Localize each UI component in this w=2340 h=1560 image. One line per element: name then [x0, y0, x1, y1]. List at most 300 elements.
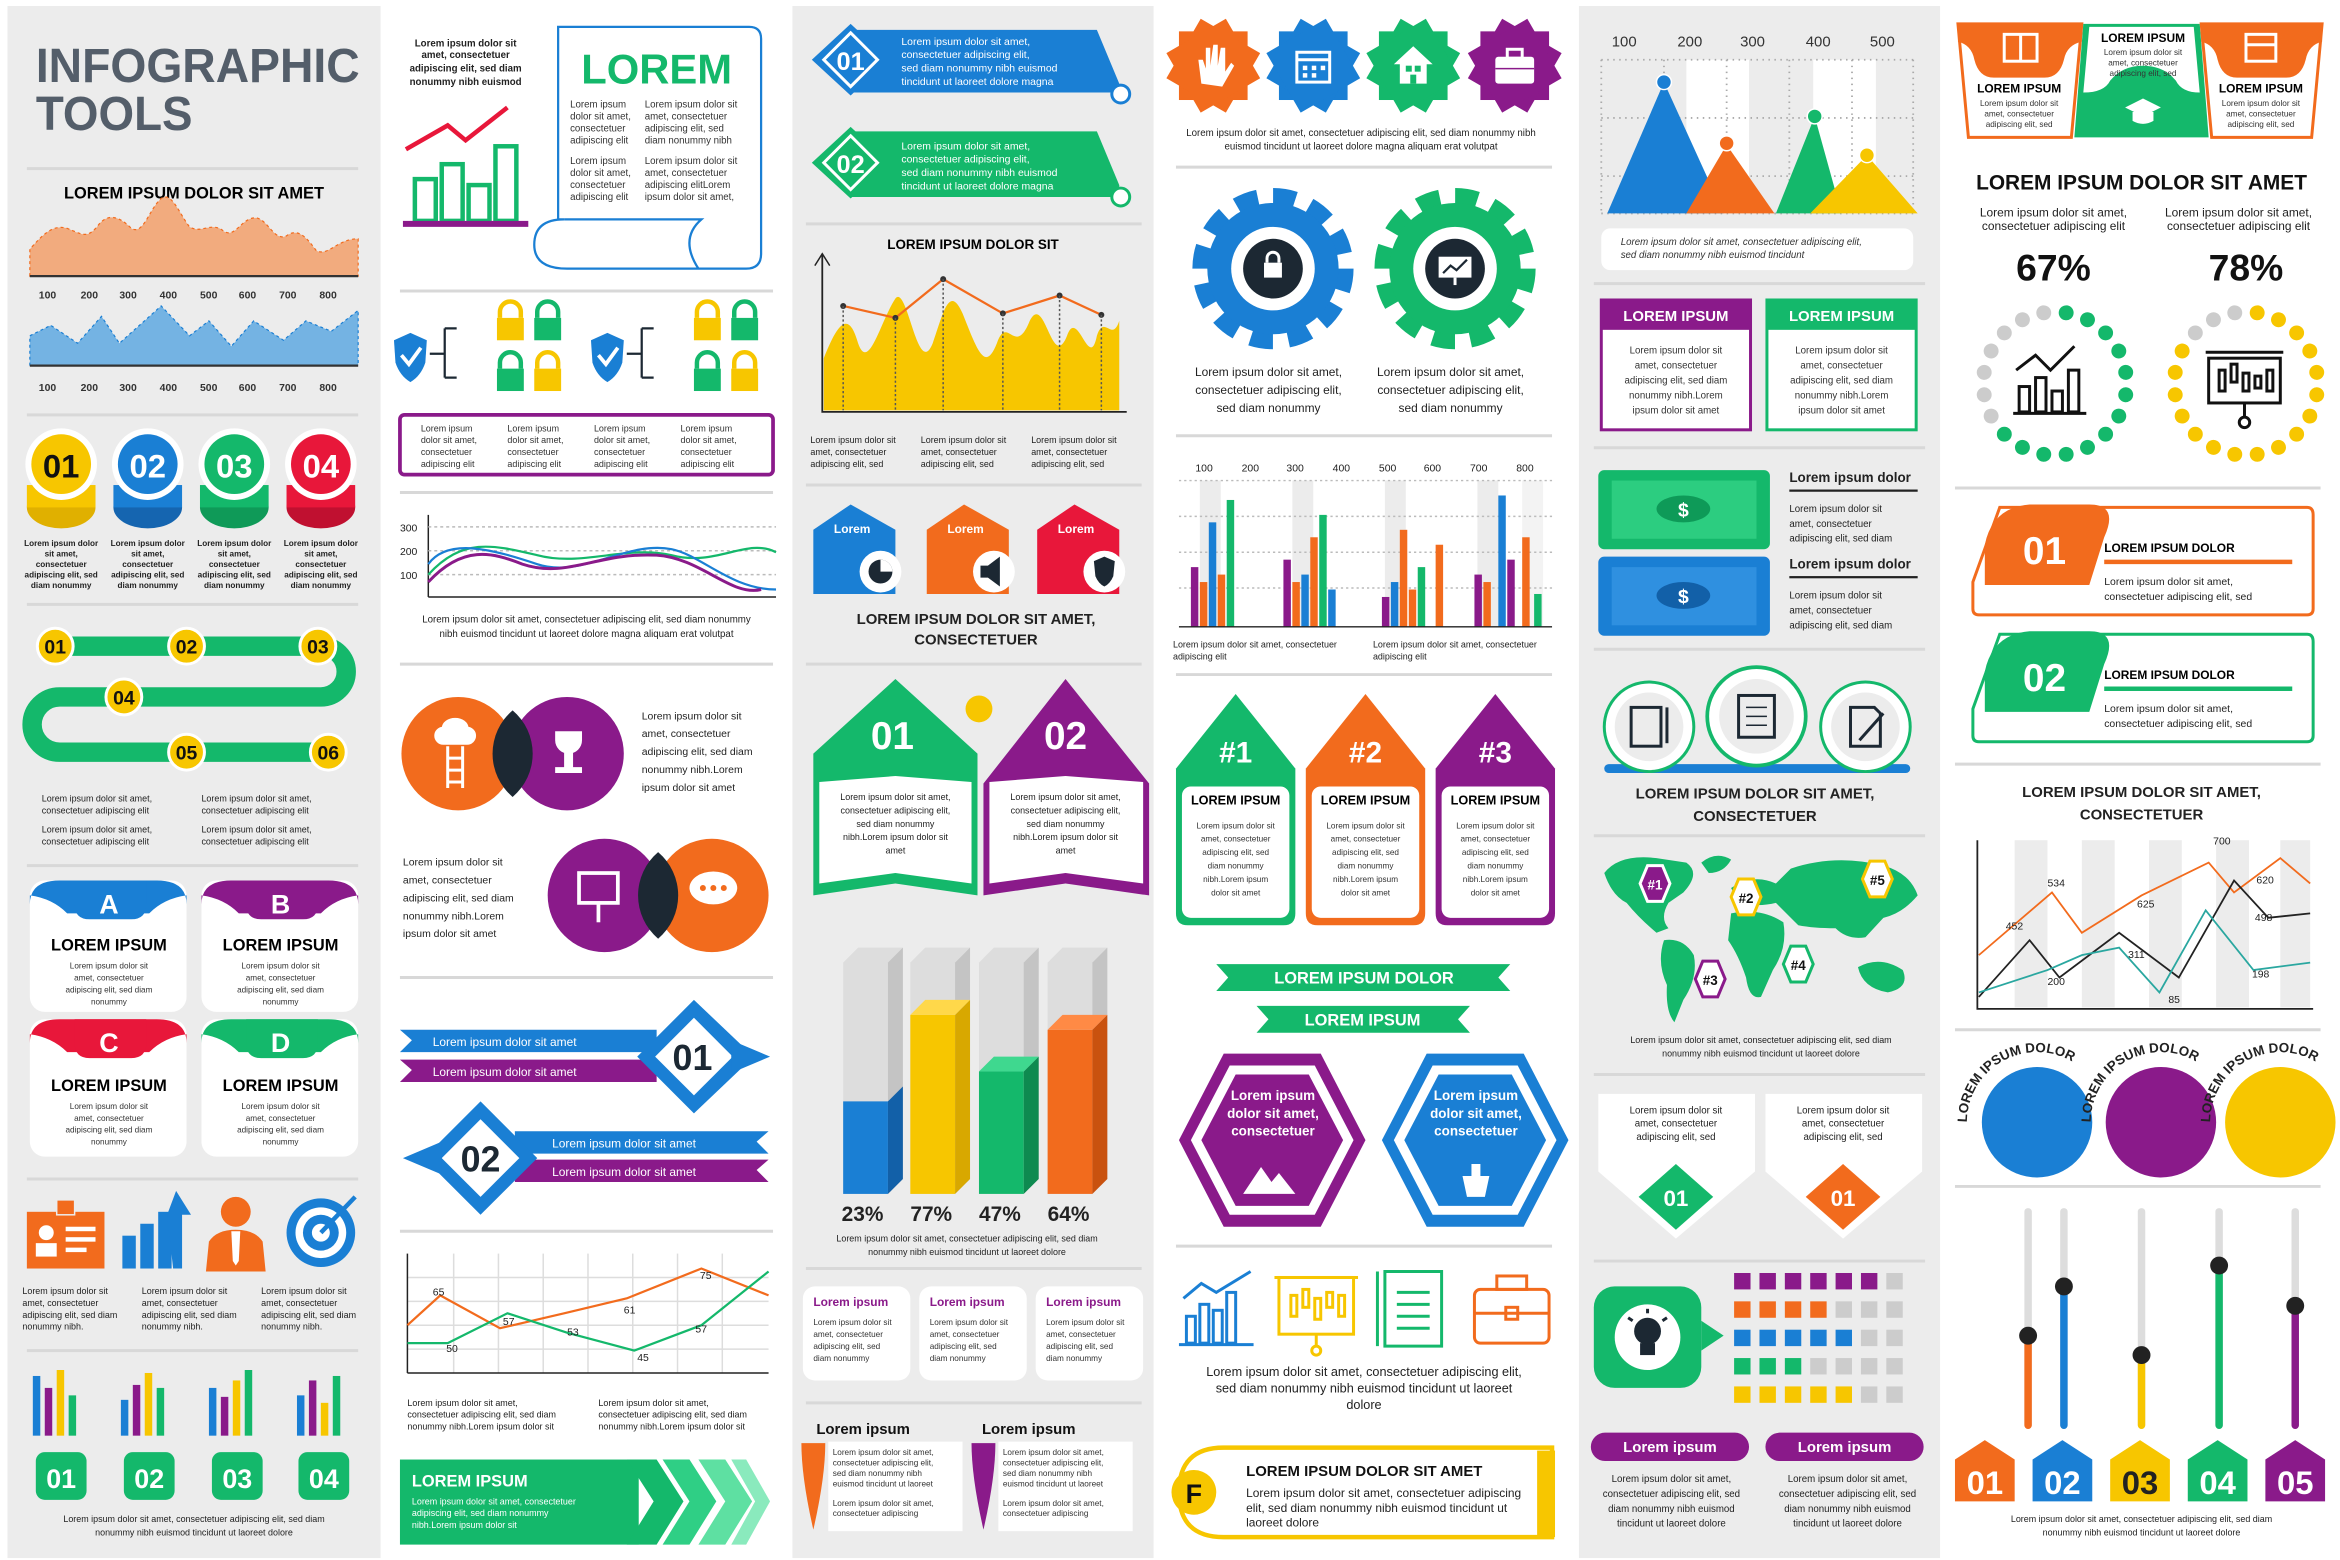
snake timeline: Lorem ipsum dolor sit amet,: [42, 793, 152, 803]
triangle chart: 400: [1806, 33, 1831, 50]
area charts: 700: [279, 290, 297, 301]
pentagon cards 01 02: consectetuer adipiscing elit,: [1011, 805, 1120, 815]
ribbons and hexagons: LOREM IPSUM DOLOR: [1274, 969, 1454, 987]
ribbons and hexagons: consectetuer: [1231, 1124, 1316, 1139]
mini bar charts 01-04: 02: [134, 1464, 164, 1494]
line icons row: Lorem ipsum dolor sit amet, consectetuer adipiscing elit,: [1206, 1365, 1522, 1379]
ABCD cards: amet, consectetuer: [246, 973, 316, 982]
circle icons on bar: [1604, 667, 1910, 825]
purple text box: Lorem ipsum: [421, 423, 473, 433]
ABCD cards: Lorem ipsum dolor sit: [70, 1102, 149, 1111]
multi line chart: CONSECTETUER: [2080, 806, 2203, 823]
numbered badges 01-04: Lorem ipsum dolor: [24, 539, 99, 548]
area charts: 600: [239, 383, 256, 394]
multi line chart: 452: [2006, 922, 2023, 933]
#1 #2 #3 cards: adipiscing elit, sed: [1462, 848, 1529, 857]
ribbons and hexagons: dolor sit amet,: [1430, 1106, 1522, 1121]
pentagon cards 01 02: [813, 679, 1149, 895]
gears: Lorem ipsum dolor sit amet,: [1195, 365, 1342, 379]
diamond cards: amet, consectetuer: [1802, 1119, 1885, 1130]
triangle chart: sed diam nonummy nibh euismod tincidunt: [1621, 250, 1806, 261]
grouped bar chart: Lorem ipsum dolor sit amet, consectetuer: [1173, 640, 1337, 650]
purple pills with text: diam nonummy nibh euismod: [1608, 1504, 1735, 1515]
purple pills with text: Lorem ipsum: [1798, 1439, 1891, 1456]
grouped bar chart: 800: [1516, 464, 1534, 475]
outlined cards: ipsum dolor sit amet: [1633, 405, 1720, 416]
banner 01: [812, 24, 1130, 103]
top tabs: adipiscing elit, sed: [2227, 120, 2295, 129]
three white cards: Lorem ipsum dolor sit: [1046, 1318, 1125, 1327]
percent heading: LOREM IPSUM DOLOR SIT AMET: [1976, 172, 2307, 195]
ABCD cards: adipiscing elit, sed diam: [237, 1126, 324, 1135]
#1 #2 #3 cards: LOREM IPSUM: [1321, 793, 1410, 807]
numbered cards 01 02: Lorem ipsum dolor sit amet,: [2104, 577, 2233, 588]
#1 #2 #3 cards: #3: [1479, 737, 1512, 770]
pentagon cards 01 02: nibh.Lorem ipsum dolor sit: [1013, 832, 1118, 842]
venn 2: amet, consectetuer: [403, 875, 492, 886]
ABCD cards: Lorem ipsum dolor sit: [70, 962, 149, 971]
ribbons and hexagons: Lorem ipsum: [1231, 1088, 1315, 1103]
pentagon cards 01 02: 02: [1044, 715, 1087, 758]
grouped bar chart: 700: [1470, 464, 1488, 475]
money bills: adipiscing elit, sed diam: [1789, 620, 1892, 631]
#1 #2 #3 cards: #2: [1349, 737, 1382, 770]
numbered badges 01-04: 02: [129, 448, 166, 485]
#1 #2 #3 cards: diam nonummy: [1467, 862, 1524, 871]
area charts: 400: [160, 383, 177, 394]
area charts: 800: [319, 383, 337, 394]
area charts: 100: [39, 290, 56, 301]
ABCD cards: B: [271, 889, 290, 919]
snake timeline: 01: [44, 637, 66, 659]
#1 #2 #3 cards: diam nonummy: [1338, 862, 1394, 871]
#1 #2 #3 cards: adipiscing elit, sed: [1202, 848, 1270, 857]
numbered cards 01 02: [1973, 504, 2313, 742]
money bills: Lorem ipsum dolor: [1789, 557, 1912, 572]
banner 02: consectetuer adipiscing elit,: [901, 155, 1030, 166]
world map: #3: [1703, 973, 1718, 988]
gears: consectetuer adipiscing elit,: [1377, 383, 1524, 397]
venn 2: Lorem ipsum dolor sit: [403, 858, 503, 869]
mini bar charts 01-04: 04: [309, 1464, 339, 1494]
outlined cards: nonummy nibh.Lorem: [1795, 390, 1888, 401]
top tabs: LOREM IPSUM: [2219, 82, 2303, 96]
chart + scroll panel: consectetuer: [570, 123, 626, 134]
diamond cards: amet, consectetuer: [1635, 1119, 1718, 1130]
top tabs: amet, consectetuer: [2108, 59, 2178, 68]
multi line chart: 311: [2128, 950, 2145, 961]
3D bar chart: 23%: [842, 1203, 884, 1226]
house icons: [813, 504, 1125, 649]
ribbon 02: Lorem ipsum dolor sit amet: [552, 1165, 697, 1179]
grouped bar chart: 600: [1424, 464, 1441, 475]
number tags 01-05: Lorem ipsum dolor sit amet, consectetuer adipiscing elit, sed diam: [2011, 1514, 2272, 1524]
top tabs: amet, consectetuer: [2226, 109, 2296, 118]
#1 #2 #3 cards: diam nonummy: [1208, 862, 1265, 871]
three white cards: adipiscing elit, sed: [930, 1342, 997, 1351]
green chevron banner: adipiscing elit, sed diam nonummy: [412, 1508, 549, 1518]
area charts: 500: [200, 290, 218, 301]
green chevron banner: [400, 1460, 770, 1545]
numbered cards 01 02: 02: [2023, 657, 2066, 700]
area charts: 300: [119, 383, 137, 394]
curved label circles: LOREM IPSUM DOLOR: [2200, 1042, 2318, 1122]
circle icons on bar: CONSECTETUER: [1693, 808, 1817, 825]
number tags 01-05: 02: [2044, 1464, 2081, 1501]
world map: #2: [1739, 891, 1754, 906]
outlined cards: amet, consectetuer: [1800, 361, 1884, 372]
grid line chart: 50: [446, 1344, 458, 1355]
purple pills with text: tincidunt ut laoreet dolore: [1617, 1519, 1726, 1530]
money bills: adipiscing elit, sed diam: [1789, 534, 1892, 545]
numbered cards 01 02: LOREM IPSUM DOLOR: [2104, 668, 2235, 682]
purple text box: consectetuer: [681, 447, 732, 457]
title: TOOLS: [36, 88, 193, 141]
numbered cards 01 02: Lorem ipsum dolor sit amet,: [2104, 704, 2233, 715]
money bills: $: [1678, 499, 1689, 521]
drop markers: consectetuer adipiscing: [833, 1509, 919, 1518]
percent heading: 67%: [2016, 247, 2091, 289]
money bills: amet, consectetuer: [1789, 605, 1872, 616]
drop markers: consectetuer adipiscing elit,: [1003, 1459, 1103, 1468]
numbered badges 01-04: Lorem ipsum dolor: [284, 539, 359, 548]
diamond cards: adipiscing elit, sed: [1803, 1132, 1883, 1143]
drop markers: Lorem ipsum: [982, 1421, 1076, 1438]
F callout: elit, sed diam nonummy nibh euismod tincidunt ut: [1246, 1501, 1508, 1515]
business icons row: amet, consectetuer: [261, 1298, 337, 1308]
diamond cards: Lorem ipsum dolor sit: [1630, 1105, 1723, 1116]
chart + scroll panel: Lorem ipsum: [570, 156, 626, 167]
multi line chart: 498: [2255, 913, 2273, 924]
F callout: LOREM IPSUM DOLOR SIT AMET: [1246, 1463, 1482, 1480]
top tabs: Lorem ipsum dolor sit: [2104, 48, 2183, 57]
gears: sed diam nonummy: [1216, 401, 1321, 415]
F callout: [1171, 1448, 1555, 1537]
grouped bar chart: adipiscing elit: [1373, 652, 1427, 662]
line icons row: dolore: [1346, 1398, 1382, 1412]
ABCD cards: nonummy: [263, 1138, 299, 1147]
line icons row: [1179, 1272, 1549, 1412]
#1 #2 #3 cards: dolor sit amet: [1211, 888, 1261, 897]
pentagon cards 01 02: 01: [871, 715, 914, 758]
#1 #2 #3 cards: Lorem ipsum dolor sit: [1326, 821, 1405, 830]
business icons row: nonummy nibh.: [142, 1322, 203, 1332]
purple text box: [400, 415, 773, 475]
pentagon cards 01 02: consectetuer adipiscing elit,: [841, 805, 950, 815]
snake timeline: Lorem ipsum dolor sit amet,: [201, 793, 312, 803]
three white cards: amet, consectetuer: [1046, 1330, 1116, 1339]
banner 02: 02: [837, 151, 865, 179]
wave line chart: 200: [400, 547, 418, 558]
#1 #2 #3 cards: Lorem ipsum dolor sit: [1456, 821, 1535, 830]
snake timeline: consectetuer adipiscing elit: [42, 805, 150, 815]
multi line chart: 534: [2048, 878, 2065, 889]
top tabs: LOREM IPSUM: [1977, 82, 2061, 96]
grouped bar chart: 200: [1242, 464, 1259, 475]
world map: #1: [1648, 877, 1663, 892]
chart + scroll panel: Lorem ipsum: [570, 99, 626, 110]
starburst icons: [1166, 19, 1562, 152]
area charts: LOREM IPSUM DOLOR SIT AMET: [64, 185, 324, 203]
three white cards: Lorem ipsum dolor sit: [930, 1318, 1009, 1327]
world map: Lorem ipsum dolor sit amet, consectetuer adipiscing elit, sed diam: [1630, 1035, 1892, 1045]
sliders: [2019, 1212, 2304, 1425]
ABCD cards: LOREM IPSUM: [51, 1077, 167, 1095]
chart + scroll panel: Lorem ipsum dolor sit: [645, 99, 738, 110]
ribbon 01: Lorem ipsum dolor sit amet: [433, 1065, 577, 1079]
gears: Lorem ipsum dolor sit amet,: [1377, 365, 1524, 379]
yellow area chart: adipiscing elit, sed: [921, 459, 994, 469]
purple text box: dolor sit amet,: [421, 435, 477, 445]
ribbons and hexagons: LOREM IPSUM: [1305, 1011, 1420, 1029]
percent heading: consectetuer adipiscing elit: [2167, 219, 2311, 233]
purple text box: Lorem ipsum: [681, 423, 732, 433]
wave line chart: nibh euismod tincidunt ut laoreet dolore magna aliquam erat volutpat: [439, 629, 734, 640]
grid line chart: Lorem ipsum dolor sit amet,: [598, 1398, 709, 1408]
chart + scroll panel: dolor sit amet,: [570, 111, 631, 122]
drop markers: sed diam nonummy nibh: [1003, 1469, 1093, 1478]
circle icons on bar: LOREM IPSUM DOLOR SIT AMET,: [1636, 785, 1874, 802]
numbered cards 01 02: consectetuer adipiscing elit, sed: [2104, 719, 2252, 730]
percent heading: Lorem ipsum dolor sit amet,: [1980, 205, 2127, 219]
purple text box: dolor sit amet,: [594, 435, 650, 445]
pentagon cards 01 02: sed diam nonummy: [856, 819, 935, 829]
chart + scroll panel: adipiscing elit, sed diam: [410, 64, 522, 75]
percent heading: 78%: [2209, 247, 2283, 289]
outlined cards: nonummy nibh.Lorem: [1629, 390, 1723, 401]
pentagon cards 01 02: nibh.Lorem ipsum dolor sit: [843, 832, 948, 842]
purple text box: adipiscing elit: [421, 459, 475, 469]
purple text box: consectetuer: [594, 447, 645, 457]
ABCD cards: nonummy: [91, 997, 128, 1006]
drop markers: [801, 1421, 1133, 1531]
snake timeline: 05: [176, 743, 198, 765]
multi line chart: LOREM IPSUM DOLOR SIT AMET,: [2022, 784, 2261, 801]
venn 2: [403, 839, 769, 952]
shields and locks: [394, 301, 758, 391]
snake timeline: 04: [113, 687, 135, 709]
dotted progress circle 78%: [2167, 304, 2325, 463]
wave line chart: [400, 515, 776, 640]
ABCD cards: amet, consectetuer: [74, 973, 144, 982]
ABCD cards: adipiscing elit, sed diam: [65, 985, 153, 994]
area charts: 700: [279, 383, 297, 394]
business icons row: Lorem ipsum dolor sit: [22, 1286, 108, 1296]
purple pills with text: consectetuer adipiscing elit, sed: [1603, 1489, 1740, 1500]
numbered badges 01-04: consectetuer: [36, 560, 87, 569]
grid line chart: consectetuer adipiscing elit, sed diam: [407, 1410, 556, 1420]
mini bar charts 01-04: Lorem ipsum dolor sit amet, consectetuer adipiscing elit, sed diam: [63, 1514, 325, 1524]
#1 #2 #3 cards: amet, consectetuer: [1331, 835, 1401, 844]
#1 #2 #3 cards: nibh.Lorem ipsum: [1333, 875, 1398, 884]
grouped bar chart: [1173, 464, 1552, 662]
purple text box: consectetuer: [507, 447, 559, 457]
purple text box: adipiscing elit: [507, 459, 562, 469]
three white cards: adipiscing elit, sed: [813, 1342, 881, 1351]
outlined cards: Lorem ipsum dolor sit: [1630, 346, 1723, 357]
title: [36, 40, 360, 141]
#1 #2 #3 cards: adipiscing elit, sed: [1332, 848, 1399, 857]
curved label circles: LOREM IPSUM DOLOR: [1958, 1042, 2075, 1122]
pentagon cards 01 02: sed diam nonummy: [1027, 819, 1105, 829]
curved label circles: [1958, 1042, 2336, 1178]
grid line chart: [407, 1254, 769, 1432]
drop markers: Lorem ipsum dolor sit amet,: [833, 1448, 934, 1457]
#1 #2 #3 cards: Lorem ipsum dolor sit: [1197, 821, 1276, 830]
numbered badges 01-04: diam nonummy: [117, 581, 178, 590]
3D bar chart: 64%: [1048, 1203, 1090, 1226]
ribbon 01: [400, 1000, 770, 1113]
purple text box: Lorem ipsum: [594, 423, 646, 433]
numbered badges 01-04: adipiscing elit, sed: [198, 571, 271, 580]
percent heading: consectetuer adipiscing elit: [1982, 219, 2126, 233]
outlined cards: amet, consectetuer: [1635, 361, 1718, 372]
triangle chart: 300: [1740, 33, 1765, 50]
area charts: 200: [81, 290, 98, 301]
chart + scroll panel: adipiscing elitLorem: [645, 180, 730, 191]
multi line chart: 620: [2256, 875, 2274, 886]
numbered cards 01 02: 01: [2023, 530, 2066, 573]
diamond cards: 01: [1663, 1186, 1688, 1211]
diamond cards: adipiscing elit, sed: [1636, 1132, 1715, 1143]
triangle chart: [1601, 33, 1918, 270]
venn 2: ipsum dolor sit amet: [403, 929, 496, 940]
multi line chart: 700: [2213, 837, 2231, 848]
snake timeline: 03: [307, 637, 329, 659]
three white cards: adipiscing elit, sed: [1046, 1342, 1113, 1351]
ribbons and hexagons: Lorem ipsum: [1434, 1088, 1518, 1103]
ABCD cards: A: [99, 889, 119, 919]
yellow area chart: Lorem ipsum dolor sit: [810, 435, 896, 445]
three white cards: Lorem ipsum: [813, 1295, 888, 1309]
ABCD cards: amet, consectetuer: [246, 1114, 316, 1123]
numbered badges 01-04: 01: [43, 448, 79, 485]
drop markers: Lorem ipsum: [816, 1421, 910, 1438]
outlined cards: [1601, 300, 1916, 430]
line icons row: sed diam nonummy nibh euismod tincidunt ut laoreet: [1216, 1381, 1513, 1395]
#1 #2 #3 cards: dolor sit amet: [1341, 888, 1391, 897]
numbered badges 01-04: sit amet,: [131, 550, 164, 559]
money bills: Lorem ipsum dolor sit: [1789, 504, 1882, 515]
F callout: F: [1186, 1479, 1202, 1509]
purple pills with text: Lorem ipsum dolor sit amet,: [1612, 1474, 1731, 1485]
ribbons and hexagons: dolor sit amet,: [1227, 1106, 1319, 1121]
grid line chart: 57: [695, 1325, 707, 1336]
green chevron banner: Lorem ipsum dolor sit amet, consectetuer: [412, 1496, 576, 1506]
numbered cards 01 02: LOREM IPSUM DOLOR: [2104, 541, 2235, 555]
ABCD cards: LOREM IPSUM: [223, 1077, 338, 1095]
yellow area chart: amet, consectetuer: [810, 447, 886, 457]
house icons: Lorem: [1058, 522, 1094, 536]
drop markers: Lorem ipsum dolor sit amet,: [833, 1499, 934, 1508]
ABCD cards: LOREM IPSUM: [51, 937, 167, 955]
ribbon 01: Lorem ipsum dolor sit amet: [433, 1035, 577, 1049]
ABCD cards: Lorem ipsum dolor sit: [241, 1102, 320, 1111]
numbered badges 01-04: [24, 428, 359, 590]
banner 01: sed diam nonummy nibh euismod: [901, 64, 1058, 75]
ribbons and hexagons: [1179, 964, 1568, 1227]
purple pills with text: Lorem ipsum dolor sit amet,: [1788, 1474, 1907, 1485]
chart + scroll panel: amet, consectetuer: [645, 111, 728, 122]
gears: consectetuer adipiscing elit,: [1195, 383, 1342, 397]
snake timeline: 02: [176, 637, 197, 659]
business icons row: nonummy nibh.: [22, 1322, 83, 1332]
ABCD cards: D: [271, 1028, 290, 1058]
chart + scroll panel: nonummy nibh euismod: [410, 77, 522, 88]
gears: sed diam nonummy: [1399, 401, 1503, 415]
ABCD cards: [30, 881, 358, 1157]
grid line chart: Lorem ipsum dolor sit amet,: [407, 1398, 518, 1408]
snake timeline: consectetuer adipiscing elit: [42, 837, 150, 847]
top tabs: amet, consectetuer: [1984, 109, 2054, 118]
venn 1: [401, 697, 753, 810]
mini bar charts 01-04: [33, 1370, 349, 1538]
banner 01: 01: [837, 48, 865, 76]
drop markers: euismod tincidunt ut laoreet: [1003, 1479, 1104, 1488]
business icons row: nonummy nibh.: [261, 1322, 322, 1332]
#1 #2 #3 cards: amet, consectetuer: [1461, 835, 1530, 844]
starburst icons: euismod tincidunt ut laoreet dolore magna aliquam erat volutpat: [1225, 141, 1498, 152]
mini bar charts 01-04: 03: [222, 1464, 252, 1494]
world map: #4: [1791, 958, 1806, 973]
grid line chart: 53: [567, 1328, 579, 1339]
three white cards: amet, consectetuer: [930, 1330, 1000, 1339]
F callout: Lorem ipsum dolor sit amet, consectetuer adipiscing: [1246, 1486, 1521, 1500]
yellow area chart: amet, consectetuer: [1031, 447, 1107, 457]
banner 02: [812, 127, 1130, 206]
number tags 01-05: [1955, 1440, 2325, 1538]
outlined cards: adipiscing elit, sed diam: [1790, 376, 1893, 387]
green chevron banner: LOREM IPSUM: [412, 1472, 528, 1490]
multi line chart: 198: [2252, 970, 2270, 981]
chart + scroll panel: LOREM: [581, 46, 732, 93]
grouped bar chart: adipiscing elit: [1173, 652, 1227, 662]
chart + scroll panel: Lorem ipsum dolor sit: [415, 38, 517, 49]
ABCD cards: nonummy: [91, 1138, 128, 1147]
chart + scroll panel: diam nonummy nibh: [645, 135, 732, 146]
business icons row: adipiscing elit, sed diam: [261, 1310, 356, 1320]
numbered badges 01-04: Lorem ipsum dolor: [197, 539, 272, 548]
triangle chart: 100: [1612, 33, 1637, 50]
numbered badges 01-04: consectetuer: [295, 560, 347, 569]
chart + scroll panel: consectetuer: [570, 180, 626, 191]
multi line chart: [1977, 784, 2313, 1009]
purple pills with text: consectetuer adipiscing elit, sed: [1779, 1489, 1916, 1500]
purple text box: adipiscing elit: [681, 459, 735, 469]
numbered badges 01-04: sit amet,: [218, 550, 251, 559]
snake timeline: [32, 628, 346, 847]
numbered badges 01-04: adipiscing elit, sed: [25, 571, 98, 580]
business icons row: adipiscing elit, sed diam: [22, 1310, 117, 1320]
ribbon 02: Lorem ipsum dolor sit amet: [552, 1137, 697, 1151]
grid line chart: 61: [624, 1305, 636, 1316]
world map: #5: [1870, 873, 1885, 888]
wave line chart: 100: [400, 571, 418, 582]
snake timeline: Lorem ipsum dolor sit amet,: [201, 825, 312, 835]
money bills: $: [1678, 586, 1689, 608]
triangle chart: Lorem ipsum dolor sit amet, consectetuer adipiscing elit,: [1621, 237, 1862, 248]
area charts: 300: [119, 290, 137, 301]
#1 #2 #3 cards: LOREM IPSUM: [1191, 793, 1280, 807]
venn 1: nonummy nibh.Lorem: [642, 765, 743, 776]
numbered badges 01-04: consectetuer: [209, 560, 261, 569]
world map: nonummy nibh euismod tincidunt ut laoreet dolore: [1662, 1049, 1860, 1059]
top tabs: Lorem ipsum dolor sit: [1980, 99, 2059, 108]
outlined cards: LOREM IPSUM: [1789, 308, 1894, 325]
drop markers: consectetuer adipiscing: [1003, 1509, 1089, 1518]
purple pills with text: tincidunt ut laoreet dolore: [1793, 1519, 1902, 1530]
diamond cards: Lorem ipsum dolor sit: [1797, 1105, 1890, 1116]
